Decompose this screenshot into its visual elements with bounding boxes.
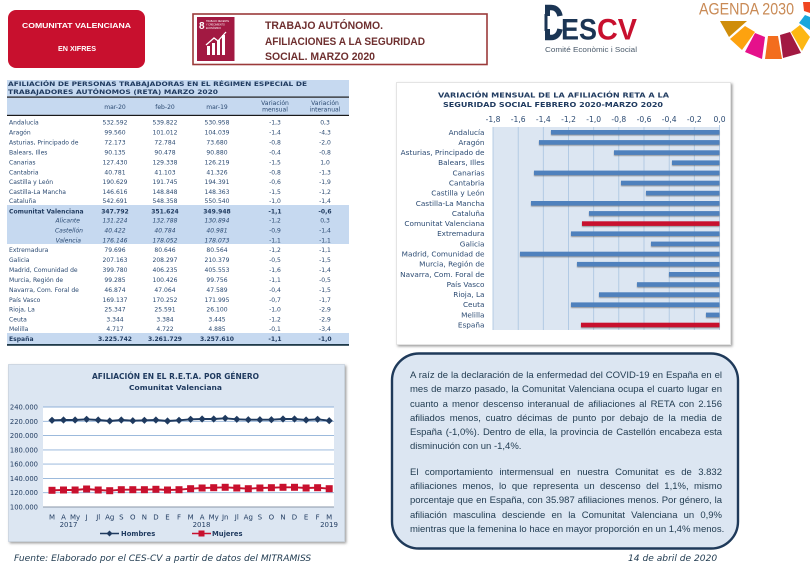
table row: España total: 3.225.742 [98,336,132,343]
table rows: regions: 1,0 [320,159,330,166]
axis labels: -0,4 [662,115,677,124]
table rows: regions: 148.363 [204,189,230,196]
table rows: Comunitat Valenciana block: 178.073 [204,238,230,245]
x axis labels: M [49,514,55,522]
axis labels: -1,8 [486,115,501,124]
table rows: Comunitat Valenciana block [9,208,332,245]
x axis labels: D [292,514,297,522]
chart title [92,370,259,392]
x axis labels: Jl [234,514,239,522]
y axis labels: 120.000 [10,489,38,497]
chart title: SEGURIDAD SOCIAL FEBRERO 2020-MARZO 2020 [443,101,663,109]
table rows: regions: 548.358 [152,198,178,205]
table rows: remaining regions: 99.756 [206,277,228,284]
table rows: regions: 148.848 [152,189,178,196]
table rows: Comunitat Valenciana block: -1,1 [319,238,331,245]
table rows: Comunitat Valenciana block: Castellón [55,227,83,235]
logo: CES CV: CV [597,14,637,46]
table rows: remaining regions: -1,5 [319,257,331,264]
logo: Agenda 2030 [699,0,810,59]
x axis labels: Ag [244,514,253,522]
legend [100,530,243,538]
table rows: regions: 72.784 [154,139,176,146]
axis labels: -0,8 [611,115,626,124]
table rows: regions: -1,4 [319,198,331,205]
table rows: regions: -0,8 [269,169,281,176]
table rows: Comunitat Valenciana block: 349.948 [203,208,231,215]
table rows: regions: -4,3 [319,129,331,136]
category labels: Ceuta [463,300,484,309]
table rows: remaining regions: 210.379 [204,257,230,264]
chart title: Comunitat Valenciana [129,384,222,392]
category labels: Castilla-La Mancha [416,199,484,208]
table rows: Comunitat Valenciana block: 130.894 [204,218,230,225]
x axis labels: E [304,514,308,522]
table rows: remaining regions: Ceuta [9,316,27,324]
y axis labels: 140.000 [10,475,38,483]
table rows: remaining regions: 80.646 [154,247,176,254]
bars [520,130,720,327]
x axis labels: Jn [221,514,228,522]
table rows: regions: Cataluña [9,198,36,205]
table rows: remaining regions: Rioja, La [9,306,35,314]
table rows: Comunitat Valenciana block: -0,6 [318,208,332,215]
table rows: Comunitat Valenciana block: -1,1 [268,208,282,215]
table rows: remaining regions: 3.344 [106,316,124,324]
table rows: regions: -1,0 [269,198,281,205]
table rows: remaining regions: Melilla [9,326,29,333]
table rows: remaining regions: -0,7 [269,297,281,304]
text block: commentary: España (-1,0%). Dentro de ella, la provincia de Castellón encabeza esta [410,427,722,438]
table rows: Comunitat Valenciana block: 347.792 [101,208,129,215]
panel: monthly variation bar chart [396,82,730,344]
table rows: regions: 190.629 [102,179,128,186]
source note: Fuente: Elaborado por el CES-CV a partir de datos del MITRAMISS [14,554,311,564]
text block: commentary [410,370,724,535]
table rows: regions: 73.680 [206,139,228,146]
table rows: remaining regions: -1,1 [319,247,331,254]
category labels: Asturias, Principado de [401,148,485,157]
table rows: Comunitat Valenciana block: 131.224 [102,218,128,225]
table rows: regions: -1,3 [319,169,331,176]
table rows: regions: 550.540 [204,198,230,205]
x axis labels: 2019 [320,521,338,529]
category labels: Cataluña [452,209,484,218]
table rows: remaining regions: Madrid, Comunidad de [9,267,78,274]
x axis labels: My [209,514,219,522]
table row: España total: España [9,336,34,343]
y axis labels [10,404,38,512]
logo: CES CV [545,8,637,54]
logo: CES CV: ES [561,14,597,46]
table rows: remaining regions: País Vasco [9,296,41,304]
table rows: remaining regions: 46.874 [104,287,126,294]
text block: commentary: afiliados menos, cuatro décimas de punto por debajo de la media de [410,413,722,424]
table rows: regions: -1,9 [319,179,331,186]
table header: mensual [262,106,288,114]
table rows: remaining regions: 171.995 [204,297,230,304]
table rows: Comunitat Valenciana block: Alicante [55,217,80,225]
category labels: Comunitat Valenciana [404,219,484,228]
axis labels: -1,6 [511,115,526,124]
table rows: regions: 530.958 [204,119,230,126]
table rows: regions: 146.616 [102,189,128,196]
table row: España total: -1,1 [268,336,282,343]
axis labels: 0,0 [713,115,726,124]
category labels: Balears, Illes [438,158,485,167]
legend: Hombres [121,530,155,538]
date: 14 de abril de 2020 [628,554,717,564]
table rows: remaining regions: 80.564 [206,247,228,254]
table rows: remaining regions: 406.235 [152,267,178,274]
table rows: regions: Balears, Illes [9,149,47,156]
table rows: remaining regions: -1,2 [269,247,281,254]
axis labels: -1,0 [586,115,601,124]
category labels: Madrid, Comunidad de [402,250,485,258]
series: Mujeres [52,487,329,491]
table rows: Comunitat Valenciana block: 176.146 [102,238,128,245]
table rows: remaining regions: 47.589 [206,287,228,294]
table rows: remaining regions: 79.696 [104,247,126,254]
table rows: remaining regions: -2,9 [319,306,331,314]
category labels: País Vasco [447,280,485,289]
table rows: regions: 90.135 [104,149,126,156]
table rows: regions: -0,6 [269,179,281,186]
x axis labels: S [258,514,263,522]
category labels: Galicia [460,239,484,248]
table rows: Comunitat Valenciana block: -1,1 [269,238,281,245]
table rows: remaining regions: -1,6 [269,267,281,274]
axis labels [486,115,726,124]
text block: commentary: disminución con un -1,4%. [410,441,521,452]
table header: mar-20 [104,104,126,111]
y axis labels: 200.000 [10,432,38,440]
table rows: remaining regions: 399.780 [102,267,128,274]
table rows: regions: Asturias, Principado de [9,139,79,146]
table row: España total [9,336,332,343]
table rows: remaining regions: 3.384 [156,316,174,324]
y axis labels: 220.000 [10,418,38,426]
text block: commentary: mientras que la femenina lo hace en mayor proporción en un 1,4% menos. [410,524,724,535]
icon: SDG 8 decent work: 8 [199,21,205,32]
category labels: Aragón [458,138,484,147]
table row: España total: 3.257.610 [200,336,234,343]
table rows: regions: Castilla y León [9,178,53,186]
table rows: Comunitat Valenciana block: Comunitat Valenciana [9,208,84,215]
y axis labels: 240.000 [10,404,38,412]
heading: report title [265,19,425,63]
chart title: AFILIACIÓN EN EL R.E.T.A. POR GÉNERO [92,370,259,381]
table rows: Comunitat Valenciana block: 0,3 [320,218,330,225]
badge: Comunitat Valenciana en xifres: EN XIFRES [58,44,96,53]
table rows: remaining regions: Navarra, Com. Foral de [9,287,79,294]
table rows: Comunitat Valenciana block: 40.981 [206,228,228,235]
table rows: regions: 41.103 [154,169,176,176]
table rows: regions: 40.781 [104,169,126,176]
panel: RETA by gender line chart [8,364,344,542]
table rows: regions: 127.430 [102,159,128,166]
text block: commentary: A raíz de la declaración de la enfermedad del COVID-19 en España en el [410,370,722,381]
text block: commentary: afiliación masculina desciende en la Comunitat Valenciana un 0,9% [410,510,722,521]
y axis labels: 180.000 [10,446,38,454]
table rows: remaining regions: 25.591 [154,306,176,314]
logo: CES CV: Comité Econòmic i Social [545,45,637,54]
category labels: Cantabria [449,178,484,188]
table rows: regions: 191.745 [152,179,178,186]
table rows: regions: 90.880 [206,149,228,156]
badge: Comunitat Valenciana en xifres: COMUNITAT VALENCIANA [22,21,132,30]
table rows: regions: -1,5 [269,189,281,196]
title box [193,14,487,64]
text block: commentary: afiliaciones menos, lo que representa un descenso del 1,1%, mismo [410,481,722,492]
table rows: Comunitat Valenciana block: 132.788 [152,218,178,225]
series: Hombres [52,418,329,421]
icon: SDG 8 decent work: Y CRECIMIENTO [206,24,225,26]
table rows: regions: -2,0 [319,139,331,146]
table rows: remaining regions: 3.445 [208,316,226,324]
legend: Mujeres [212,530,243,538]
table rows: remaining regions: Galicia [9,257,30,264]
axis labels: -1,2 [561,115,576,124]
table rows: remaining regions: 4.885 [208,326,226,333]
table header [104,99,341,114]
category labels [400,128,485,330]
table rows: remaining regions: -0,5 [319,277,331,284]
table rows: Comunitat Valenciana block: -1,4 [319,228,331,235]
table rows: remaining regions: Extremadura [9,247,49,254]
table rows: regions [9,118,331,205]
y axis labels: 160.000 [10,461,38,469]
table rows: regions: 72.173 [104,139,126,146]
table rows: regions: -1,2 [319,189,331,196]
table rows: remaining regions: 47.064 [154,287,176,294]
x axis labels: M [188,514,194,522]
x axis labels: O [130,514,136,522]
table rows: remaining regions: 4.722 [156,326,174,333]
x axis labels: A [61,514,66,522]
table rows: remaining regions: -1,7 [319,297,331,304]
table header: Variación [261,99,289,107]
table rows: remaining regions: -1,2 [269,316,281,324]
table rows: regions: Aragón [9,128,31,136]
table rows: remaining regions: -1,0 [269,306,281,314]
table rows: remaining regions: 405.553 [204,267,230,274]
table header: feb-20 [155,104,175,111]
table header: Variación [311,99,339,107]
x axis labels: 2018 [193,521,210,529]
text block: commentary: El comportamiento intermensual en nuestra Comunitat es de 3.832 [410,467,722,478]
table rows: Comunitat Valenciana block: 40.784 [154,228,176,235]
table rows: regions: 129.338 [152,159,178,166]
table: RETA affiliation by region [7,79,349,346]
badge: Comunitat Valenciana en xifres [8,10,145,68]
heading: report title: TRABAJO AUTÓNOMO. [265,19,383,32]
table rows: regions: 539.822 [152,119,178,126]
table header: mar-19 [206,104,228,111]
plot area [43,407,334,507]
table rows: regions: -0,8 [319,149,331,156]
table rows: remaining regions: -0,4 [269,287,281,294]
category labels: España [458,320,484,330]
table rows: regions: 542.691 [102,198,128,205]
table rows: remaining regions: 99.285 [104,277,126,284]
table header: interanual [310,106,341,114]
table rows: regions: 99.560 [104,129,126,136]
category labels: Navarra, Com. Foral de [400,270,485,279]
x axis labels: Ag [105,514,114,522]
table rows: Comunitat Valenciana block: 351.624 [151,208,179,215]
x axis labels: O [269,514,275,522]
table rows: regions: -1,4 [269,129,281,136]
table rows: remaining regions: -0,5 [269,257,281,264]
x axis labels: My [70,514,80,522]
table rows: remaining regions: 26.100 [206,306,228,314]
icon: SDG 8 decent work [197,17,234,61]
x axis labels: E [165,514,170,522]
x axis labels: M [326,514,332,522]
table rows: remaining regions: -1,4 [319,267,331,274]
x axis labels: F [316,514,320,522]
table rows: regions: Cantabria [9,169,39,176]
heading: report title: SOCIAL. MARZO 2020 [265,51,375,63]
x axis labels: S [119,514,124,522]
table rows: regions: 90.478 [154,149,176,156]
x axis labels: Jl [95,514,100,522]
category labels: Murcia, Región de [419,260,485,269]
panel: commentary box background [392,354,738,548]
x axis labels: D [153,514,159,522]
text block: commentary: cuanto a menor descenso interanual de afiliaciones al RETA con 2.156 [410,399,722,410]
heading: report title: AFILIACIONES A LA SEGURIDAD [265,36,425,48]
x axis labels: J [85,514,88,522]
table title [8,79,307,96]
table rows: regions: 194.391 [204,179,230,186]
table rows: regions: 41.326 [206,169,228,176]
table title: TRABAJADORES AUTÓNOMOS (RETA) MARZO 2020 [8,87,219,96]
chart title: VARIACIÓN MENSUAL DE LA AFILIACIÓN RETA A LA [438,90,670,100]
category labels: Castilla y León [431,189,484,198]
table rows: remaining regions: 170.252 [152,297,178,304]
text block: commentary: mes de marzo pasado, la Comunitat Valenciana ocupa el cuarto lugar en [410,384,722,395]
table row: España total: 3.261.729 [148,336,182,343]
table rows: regions: Castilla-La Mancha [9,189,66,196]
table rows: regions: -1,5 [269,159,281,166]
table rows: remaining regions: -3,4 [319,326,331,333]
table rows: regions: -0,8 [269,139,281,146]
category labels: Andalucía [449,128,484,137]
category labels: Rioja, La [453,290,484,299]
table rows: regions: 532.592 [102,119,128,126]
table rows: remaining regions: -0,1 [269,326,281,333]
table rows: remaining regions: 169.137 [102,297,128,304]
table rows: remaining regions: -1,1 [269,277,281,284]
table title: AFILIACIÓN DE PERSONAS TRABAJADORAS EN EL RÉGIMEN ESPECIAL DE [8,79,307,88]
x axis labels: N [142,514,147,522]
table rows: regions: -0,4 [269,149,281,156]
x axis labels: A [200,514,205,522]
table rows: remaining regions: Murcia, Región de [9,276,63,284]
text block: commentary: porcentaje que en España, con 35.987 afiliaciones menos. Por género, la [410,495,722,506]
table rows: Comunitat Valenciana block: 40.422 [104,228,126,235]
category labels: Melilla [461,310,484,319]
plot area [493,127,720,330]
table rows: regions: 104.039 [204,129,230,136]
category labels: Canarias [453,168,485,177]
table rows: remaining regions: 207.163 [102,257,128,264]
table rows: remaining regions: -2,9 [319,316,331,324]
x axis labels: 2017 [60,521,77,529]
table row: España total: -1,0 [318,336,332,343]
table rows: Comunitat Valenciana block: 178.052 [152,238,178,245]
table rows: regions: Canarias [9,159,36,166]
icon: SDG 8 decent work: TRABAJO DECENTE [206,20,230,23]
x axis labels [49,514,338,529]
table rows: regions: 0,3 [320,119,330,126]
table rows: Comunitat Valenciana block: -0,9 [269,228,281,235]
table rows: Comunitat Valenciana block: Valencia [56,238,81,245]
table rows: remaining regions: -1,5 [319,287,331,294]
chart title [438,90,670,109]
table rows: regions: Andalucía [9,118,39,126]
x axis labels: F [177,514,181,522]
table rows: regions: -1,3 [269,119,281,126]
table rows: remaining regions: 100.426 [152,277,178,284]
axis labels: -0,2 [687,115,702,124]
table rows: regions: 101.012 [152,129,178,136]
table rows: remaining regions: 208.297 [152,257,178,264]
category labels: Extremadura [437,229,484,238]
y axis labels: 100.000 [10,504,38,512]
table rows: Comunitat Valenciana block: -1,2 [269,218,281,225]
icon: SDG 8 decent work: ECONÓMICO [206,27,221,30]
axis labels: -1,4 [536,115,551,124]
table rows: remaining regions: 4.717 [106,326,124,333]
table rows: remaining regions [9,247,331,333]
axis labels: -0,6 [637,115,652,124]
table rows: regions: 126.219 [204,159,230,166]
x axis labels: N [280,514,286,522]
table rows: remaining regions: 25.347 [104,306,126,314]
